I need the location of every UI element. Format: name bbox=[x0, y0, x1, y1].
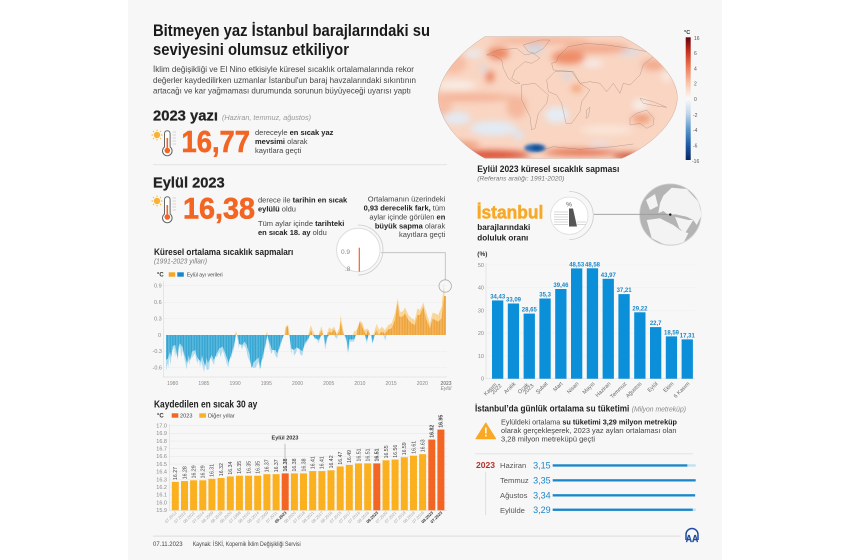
callout: magnifier on 0.93 peak: 0.9 bbox=[341, 249, 350, 256]
text: summer record: mevsimi olarak bbox=[255, 137, 308, 146]
legend: hottest months: 2023 bbox=[180, 414, 192, 420]
title bbox=[153, 21, 430, 59]
legend: map colour scale: 6 bbox=[694, 51, 697, 57]
chart: Istanbul dam fill bars: Ağustos bbox=[625, 381, 644, 399]
heading: anomaly chart: Küresel ortalama sıcaklık sapmaları bbox=[154, 247, 293, 258]
text: consumption note: 3,28 milyon metreküpü geçti bbox=[501, 435, 595, 444]
legend: anomaly chart: Eylül ayı verileri bbox=[187, 272, 223, 278]
chart: hottest 30 months bars: 07.2017 bbox=[338, 510, 352, 524]
heading: Istanbul dam fill: doluluk oranı bbox=[477, 233, 528, 243]
chart: hottest 30 months bars: 09.2023 bbox=[274, 510, 288, 524]
text: consumption note: olarak gerçekleşerek, 2023 yaz ayları ortalaması olan bbox=[501, 426, 676, 435]
heading: 2023 summer bbox=[153, 109, 311, 125]
chart: hottest 30 months bars: 16.38 bbox=[292, 458, 298, 472]
chart: Istanbul dam fill bars: 22,7 bbox=[650, 321, 662, 327]
footer bbox=[153, 536, 680, 548]
heading: 2023 summer: 2023 yazı bbox=[153, 109, 218, 125]
chart: global temperature anomalies: 1995 bbox=[261, 381, 272, 387]
chart: hottest 30 months bars: 16.35 bbox=[237, 461, 243, 474]
chart: hottest 30 months bars: 08.2022 bbox=[182, 510, 197, 524]
chart: hottest 30 months bars: 16.47 bbox=[338, 452, 344, 465]
heading: 2023 summer: (Haziran, temmuz, ağustos) bbox=[222, 113, 311, 122]
chart: hottest 30 months bars: 16.49 bbox=[347, 450, 353, 463]
heading: Istanbul dam fill: İstanbul bbox=[477, 201, 543, 222]
text: deviation callout: aylar içinde görülen en bbox=[369, 212, 446, 221]
chart: global temperature anomalies bbox=[152, 281, 452, 392]
chart: hottest 30 months bars: 16.35 bbox=[246, 461, 252, 474]
chart: global temperature anomalies: 2020 bbox=[417, 381, 428, 387]
chart: global temperature anomalies: -0.6 bbox=[152, 366, 162, 372]
chart: hottest 30 months bars: 08.2019 bbox=[402, 510, 416, 524]
footer: Kaynak: İSKİ, Kopernik İklim Değişikliği Servisi bbox=[193, 541, 301, 548]
chart: Istanbul dam fill bars: 20 bbox=[478, 331, 484, 337]
chart: hottest 30 months bars: 16.59 bbox=[402, 442, 408, 455]
legend: map colour scale: -6 bbox=[693, 144, 698, 150]
chart: hottest 30 months bars: 16.55 bbox=[384, 445, 390, 458]
chart: Istanbul dam fill bars: 43,97 bbox=[601, 273, 616, 279]
text: consumption note: Eylüldeki ortalama su tüketimi 3,29 milyon metreküp bbox=[501, 417, 677, 426]
chart: hottest 30 months bars: 08.2017 bbox=[310, 510, 325, 524]
big number 16,77: 16,77 bbox=[182, 124, 250, 159]
chart: hottest 30 months bars: 07.2023 bbox=[429, 510, 444, 524]
panel: background bbox=[128, 0, 722, 560]
infographic page bbox=[152, 22, 702, 548]
legend: map colour scale: 4 bbox=[694, 66, 697, 72]
chart: monthly consumption lines bbox=[476, 460, 696, 515]
chart: Istanbul dam fill bars: 37,21 bbox=[617, 288, 632, 294]
icon: thermometer and sun 2023 bbox=[152, 130, 176, 156]
chart: hottest 30 months bars: 16.41 bbox=[320, 456, 326, 469]
chart: hottest 30 months bars: 16.38 bbox=[283, 458, 289, 472]
chart: global temperature anomalies: 2000 bbox=[292, 381, 303, 387]
chart: Istanbul dam fill bars: 35,3 bbox=[539, 292, 552, 298]
chart: Istanbul dam fill bars: 17,31 bbox=[680, 334, 695, 340]
chart: Istanbul dam fill bars: Ocak bbox=[517, 382, 531, 395]
chart: global temperature anomalies: 0.3 bbox=[154, 316, 162, 322]
chart: monthly consumption lines: Haziran bbox=[500, 461, 526, 470]
chart: hottest 30 months bars: 07.2019 bbox=[411, 510, 426, 524]
chart: Istanbul dam fill bars: Haziran bbox=[595, 381, 612, 399]
chart: global temperature anomalies: 2023 bbox=[440, 381, 452, 387]
chart: hottest 30 months bars: 16.42 bbox=[329, 455, 335, 468]
legend: anomaly chart: °C bbox=[157, 272, 164, 278]
chart: global temperature anomalies: 0.6 bbox=[154, 300, 162, 306]
chart: hottest 30 months bars: 08.2020 bbox=[283, 510, 297, 524]
intro text: artacağı ve kar yağmaması durumunda sorunun büyüyeceği uyarısı yaptı bbox=[153, 85, 411, 95]
text: deviation callout: büyük sapma olarak bbox=[375, 221, 446, 230]
chart: monthly consumption lines: Eylülde bbox=[500, 506, 525, 515]
text: September record: eylülü oldu bbox=[258, 205, 296, 214]
heading: Istanbul dam fill bbox=[477, 201, 543, 243]
chart: Istanbul dam fill bars: Mayıs bbox=[582, 381, 597, 396]
chart: global temperature anomalies: 1985 bbox=[198, 381, 210, 387]
legend: hottest months bbox=[157, 413, 235, 420]
legend: map colour scale bbox=[684, 30, 700, 165]
chart: hottest 30 months bars: 07.2019 bbox=[393, 510, 407, 524]
intro text bbox=[153, 64, 416, 95]
chart: hottest 30 months bars: 07.2011 bbox=[265, 510, 279, 524]
chart: Istanbul dam fill bars: Şubat bbox=[535, 381, 550, 396]
chart: hottest 30 months bars: 07.2012 bbox=[164, 510, 178, 524]
callout: magnifier on 0.93 peak bbox=[337, 225, 451, 292]
heading: daily water consumption: İstanbul’da günlük ortalama su tüketimi bbox=[475, 404, 629, 414]
chart: hottest 30 months bars: 16.37 bbox=[274, 459, 280, 472]
chart: hottest 30 months bars: 16.3 bbox=[156, 477, 167, 483]
map caption: Eylül 2023 küresel sıcaklık sapması bbox=[477, 164, 619, 175]
chart: hottest 30 months bars bbox=[156, 415, 447, 524]
heading: hottest 30 months: Kaydedilen en sıcak 30 ay bbox=[154, 399, 257, 411]
chart: Istanbul dam fill bars: Ekim bbox=[663, 381, 676, 394]
chart: hottest 30 months bars: 16.29 bbox=[191, 465, 197, 478]
chart: Istanbul dam fill bars: (%) bbox=[477, 251, 487, 258]
chart: hottest 30 months bars: 16.51 bbox=[356, 448, 362, 462]
chart: Istanbul dam fill bars: 30 bbox=[478, 308, 484, 314]
chart: monthly consumption lines: 3,34 bbox=[533, 490, 551, 500]
chart: hottest 30 months bars: 16.34 bbox=[228, 462, 234, 475]
chart: hottest 30 months bars: 17.0 bbox=[156, 424, 167, 430]
chart: hottest 30 months bars: 16.35 bbox=[256, 461, 262, 474]
chart: Istanbul dam fill bars: Kasım bbox=[483, 382, 499, 397]
chart: hottest 30 months bars: 16.4 bbox=[156, 470, 167, 476]
chart: hottest 30 months bars: 16.27 bbox=[173, 467, 179, 480]
chart: hottest 30 months bars: 16.61 bbox=[411, 441, 417, 454]
chart: Istanbul dam fill bars: 39,46 bbox=[553, 283, 569, 289]
chart: hottest 30 months bars: 07.2009 bbox=[255, 510, 270, 524]
chart: Istanbul dam fill bars: 33,09 bbox=[506, 298, 522, 304]
chart: Istanbul dam fill bars: 6 Kasım bbox=[673, 381, 692, 400]
chart: Istanbul dam fill bars: 2023 bbox=[523, 383, 535, 396]
icon: dam in circle bbox=[551, 192, 593, 240]
chart: global temperature anomalies: Eylül bbox=[441, 386, 452, 392]
chart: hottest 30 months bars: 07.2016 bbox=[347, 510, 361, 524]
chart: hottest 30 months bars: 16.29 bbox=[201, 465, 207, 478]
chart: hottest 30 months bars: 08.2021 bbox=[301, 510, 316, 524]
chart: Istanbul dam fill bars: Eylül bbox=[647, 381, 659, 394]
text: September record: derece ile tarihin en sıcak bbox=[258, 195, 348, 204]
chart: monthly consumption lines: 2023 bbox=[476, 460, 495, 470]
icon: thermometer and sun September bbox=[152, 196, 176, 223]
annotation: September 2023 bbox=[272, 436, 298, 458]
text: consumption note bbox=[501, 417, 677, 444]
map caption bbox=[477, 164, 619, 182]
chart: hottest 30 months bars: 08.2020 bbox=[219, 510, 233, 524]
chart: hottest 30 months bars: 16.95 bbox=[439, 415, 445, 428]
chart: hottest 30 months bars: 15.9 bbox=[156, 508, 167, 514]
chart: hottest 30 months bars: 07.2020 bbox=[374, 510, 389, 524]
text: September record: en sıcak 18. ay oldu bbox=[258, 228, 327, 237]
world temperature map bbox=[427, 35, 680, 160]
heading: daily water consumption: (Milyon metreküp) bbox=[632, 407, 686, 414]
heading: September 2023: Eylül 2023 bbox=[153, 176, 225, 192]
chart: hottest 30 months bars: 07.2015 bbox=[329, 510, 343, 524]
chart: hottest 30 months bars: 16.56 bbox=[393, 445, 399, 458]
text: September record bbox=[258, 195, 348, 237]
title: seviyesini olumsuz etkiliyor bbox=[153, 40, 349, 59]
chart: Istanbul dam fill bars: Temmuz bbox=[609, 381, 629, 400]
text: deviation callout: 0,93 derecelik fark, tüm bbox=[364, 204, 445, 213]
chart: hottest 30 months bars: 08.2014 bbox=[246, 510, 261, 524]
chart: Istanbul dam fill bars: 0 bbox=[481, 377, 484, 383]
text: deviation callout: Ortalamanın üzerindeki bbox=[368, 195, 446, 204]
intro text: İklim değişikliği ve El Nino etkisiyle küresel sıcaklık ortalamalarında rekor bbox=[153, 64, 414, 74]
icon: warning triangle bbox=[476, 423, 496, 439]
chart: global temperature anomalies: 1980 bbox=[167, 381, 178, 387]
legend: map colour scale: °C bbox=[684, 30, 690, 36]
chart: hottest 30 months bars: 07.1998 bbox=[228, 510, 242, 524]
chart: Istanbul dam fill bars: 29,22 bbox=[632, 306, 648, 312]
chart: hottest 30 months bars: 08.2009 bbox=[200, 510, 215, 524]
chart: Istanbul dam fill bars: 18,59 bbox=[664, 330, 680, 336]
chart: Istanbul dam fill bars: Nisan bbox=[566, 381, 580, 395]
legend: map colour scale: 2 bbox=[694, 82, 697, 88]
chart: hottest 30 months bars: 16.38 bbox=[301, 458, 307, 472]
chart: Istanbul dam fill bars: 48,58 bbox=[585, 262, 601, 268]
chart: hottest 30 months bars: 16.63 bbox=[420, 439, 426, 452]
chart: hottest 30 months bars: 08.2018 bbox=[209, 510, 224, 524]
chart: hottest 30 months bars: 08.2016 bbox=[319, 510, 334, 524]
icon: AA logo: AA bbox=[686, 534, 698, 545]
chart: hottest 30 months bars: 07.2022 bbox=[173, 510, 187, 524]
legend: map colour scale: -2 bbox=[693, 113, 698, 119]
chart: Istanbul dam fill bars: 34,43 bbox=[490, 294, 506, 300]
icon: dam in circle: % bbox=[566, 202, 572, 208]
heading: anomaly chart bbox=[154, 247, 293, 265]
chart: hottest 30 months bars: 16.28 bbox=[182, 466, 188, 479]
callout: magnifier on 0.93 peak: .8 bbox=[345, 266, 351, 273]
legend: map colour scale: -16 bbox=[692, 159, 699, 165]
chart: global temperature anomalies: 2010 bbox=[354, 381, 366, 387]
text: summer record: kayıtlara geçti bbox=[255, 146, 302, 155]
chart: hottest 30 months bars: 16.0 bbox=[156, 500, 167, 506]
chart: global temperature anomalies: 0.9 bbox=[154, 284, 162, 290]
chart: Istanbul dam fill bars: Aralık bbox=[503, 381, 518, 395]
chart: hottest 30 months bars: 16.37 bbox=[265, 459, 271, 472]
chart: global temperature anomalies: 0 bbox=[158, 333, 161, 339]
legend: map colour scale: -4 bbox=[693, 128, 698, 134]
chart: hottest 30 months bars: 16.7 bbox=[156, 446, 167, 452]
heading: anomaly chart: (1991-2023 yılları) bbox=[154, 258, 207, 265]
chart: hottest 30 months bars: 07.2014 bbox=[191, 510, 206, 524]
text: deviation callout: kayıtlara geçti bbox=[399, 230, 446, 239]
intro text: değerler kaydedilirken uzmanlar İstanbul'un baraj havzalarındaki sıkıntının bbox=[153, 75, 416, 85]
icon: AA logo bbox=[686, 528, 698, 545]
text: September record: Tüm aylar içinde tarihteki bbox=[258, 219, 344, 228]
text: deviation callout bbox=[364, 195, 446, 239]
chart: hottest 30 months bars: 16.32 bbox=[219, 463, 225, 476]
chart: hottest 30 months bars: 16.2 bbox=[156, 485, 167, 491]
chart: hottest 30 months bars: 16.6 bbox=[156, 454, 167, 460]
chart: Istanbul dam fill bars: 48,53 bbox=[569, 262, 585, 268]
annotation: September 2023: Eylül 2023 bbox=[272, 436, 298, 442]
chart: monthly consumption lines: 3,29 bbox=[533, 505, 551, 515]
chart: hottest 30 months bars: 16.51 bbox=[366, 448, 372, 462]
text: summer record bbox=[255, 128, 334, 155]
legend: hottest months: Diğer yıllar bbox=[208, 414, 235, 420]
title: Bitmeyen yaz İstanbul barajlarındaki su bbox=[153, 21, 430, 40]
chart: Istanbul dam fill bars: 28,65 bbox=[522, 308, 537, 314]
legend: hottest months: °C bbox=[157, 414, 164, 420]
chart: monthly consumption lines: Temmuz bbox=[500, 476, 529, 485]
chart: hottest 30 months bars: 06.2023 bbox=[365, 510, 380, 524]
chart: Istanbul dam fill bars: Mart bbox=[552, 381, 565, 393]
chart: hottest 30 months bars: 16.82 bbox=[430, 425, 436, 438]
legend: anomaly chart bbox=[157, 272, 223, 278]
icon: globe locating Istanbul bbox=[594, 184, 702, 246]
legend: map colour scale: 16 bbox=[694, 36, 700, 42]
chart: hottest 30 months bars: 16.8 bbox=[156, 439, 167, 445]
text: summer record: dereceyle en sıcak yaz bbox=[255, 128, 334, 137]
chart: hottest 30 months bars: 16.41 bbox=[310, 456, 316, 469]
chart: monthly consumption lines: 3,35 bbox=[533, 475, 551, 485]
chart: hottest 30 months bars: 16.1 bbox=[156, 493, 167, 499]
chart: monthly consumption lines: 3,15 bbox=[533, 460, 551, 470]
chart: hottest 30 months bars: 08.2016 bbox=[356, 510, 371, 524]
big number 16,38: 16,38 bbox=[183, 192, 255, 225]
chart: hottest 30 months bars: 08.2023 bbox=[420, 510, 435, 524]
chart: global temperature anomalies: 2015 bbox=[386, 381, 397, 387]
chart: global temperature anomalies: 2005 bbox=[323, 381, 334, 387]
chart: Istanbul dam fill bars: 50 bbox=[478, 263, 484, 269]
chart: Istanbul dam fill bars bbox=[477, 251, 695, 400]
chart: hottest 30 months bars: 07.2021 bbox=[383, 510, 398, 524]
heading: Istanbul dam fill: barajlarındaki bbox=[477, 222, 530, 232]
chart: Istanbul dam fill bars: 40 bbox=[478, 286, 484, 292]
chart: hottest 30 months bars: 16.9 bbox=[156, 431, 167, 437]
legend: map colour scale: 0 bbox=[694, 97, 697, 103]
chart: hottest 30 months bars: 16.31 bbox=[210, 464, 216, 477]
chart: hottest 30 months bars: 08.2010 bbox=[237, 510, 252, 524]
chart: global temperature anomalies: 1990 bbox=[230, 381, 241, 387]
chart: monthly consumption lines: Ağustos bbox=[500, 491, 528, 500]
map caption: (Referans aralığı: 1991-2020) bbox=[477, 176, 564, 182]
chart: global temperature anomalies: -0.3 bbox=[152, 349, 162, 355]
chart: hottest 30 months bars: 16.51 bbox=[375, 448, 381, 462]
chart: Istanbul dam fill bars: 10 bbox=[478, 354, 484, 360]
chart: hottest 30 months bars: 07.2018 bbox=[292, 510, 306, 524]
footer: 07.11.2023 bbox=[153, 542, 183, 548]
chart: hottest 30 months bars: 16.5 bbox=[156, 462, 167, 468]
chart: Istanbul dam fill bars: 2022 bbox=[491, 383, 503, 396]
